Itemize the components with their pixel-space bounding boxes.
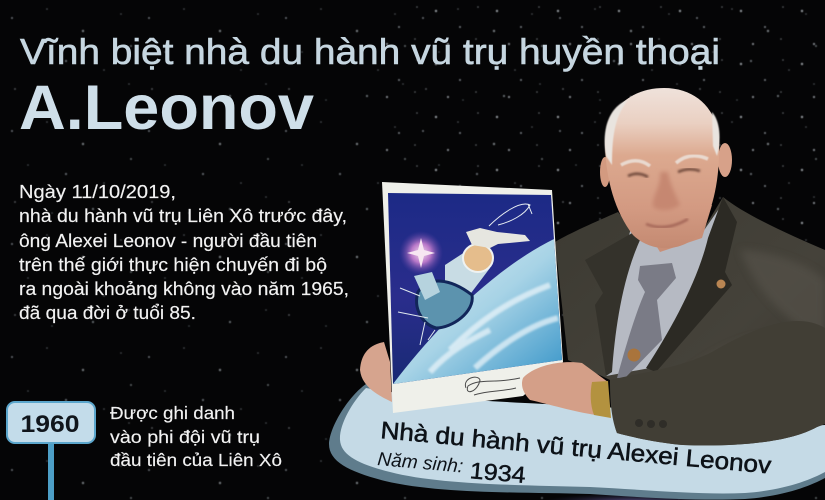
sleeve [610,321,825,445]
intro text block: ông Alexei Leonov - người đầu tiên [19,231,317,251]
jacket [555,197,825,445]
side hair [605,100,720,165]
face [605,88,719,248]
jacket highlight [690,250,825,420]
intro text block [19,182,349,323]
intro text block: ra ngoài khoảng không vào năm 1965, [19,279,349,299]
sleeve buttons [635,419,667,428]
left ear [600,157,610,187]
glowing star [400,232,442,274]
birth year: 1934 [469,457,527,488]
event description: Được ghi danh [110,403,235,423]
caption text: Nhà du hành vũ trụ Alexei Leonov [379,417,772,480]
jacket lapels [585,232,640,376]
painting sky [388,193,562,384]
painting card [382,182,570,413]
neck [636,205,712,252]
brows [621,156,708,166]
intro text block: đã qua đời ở tuổi 85. [19,303,196,323]
earth [393,238,570,384]
lapel pin [716,280,726,288]
head [600,88,732,248]
eyes [628,169,700,177]
title name: A.Leonov [19,73,314,143]
event description: đầu tiên của Liên Xô [110,450,282,470]
timeline line [48,442,54,500]
intro text block: Ngày 11/10/2019, [19,182,176,202]
title [19,31,720,143]
intro text block: trên thế giới thực hiện chuyến đi bộ [19,255,327,275]
timeline: 1960 [7,402,282,500]
title: Vĩnh biệt nhà du hành vũ trụ huyền thoại [20,31,720,72]
portrait: Alexei Leonov holding painting [360,88,825,445]
intro text block: nhà du hành vũ trụ Liên Xô trước đây, [19,206,347,226]
event description [110,403,282,470]
spacecraft ring [463,244,493,272]
year badge [7,402,95,443]
astronaut [466,228,530,248]
mouth [646,219,688,227]
tie badge [628,348,640,362]
right ear [718,143,732,177]
watch [591,381,611,418]
nose [653,172,680,210]
birth year [376,449,527,488]
ribbon edge [329,384,825,500]
left hand [360,342,392,402]
caption ribbon [329,384,825,500]
right hand [522,362,608,415]
tie [617,263,676,378]
signature [465,377,520,395]
tether [489,204,532,226]
spacecraft capsule [417,281,472,328]
birth year: Năm sinh: [377,449,464,477]
event description: vào phi đội vũ trụ [110,427,260,447]
ribbon face [340,388,825,493]
year label: 1960 [20,411,80,438]
spacecraft body [445,253,490,293]
shirt [606,203,723,376]
